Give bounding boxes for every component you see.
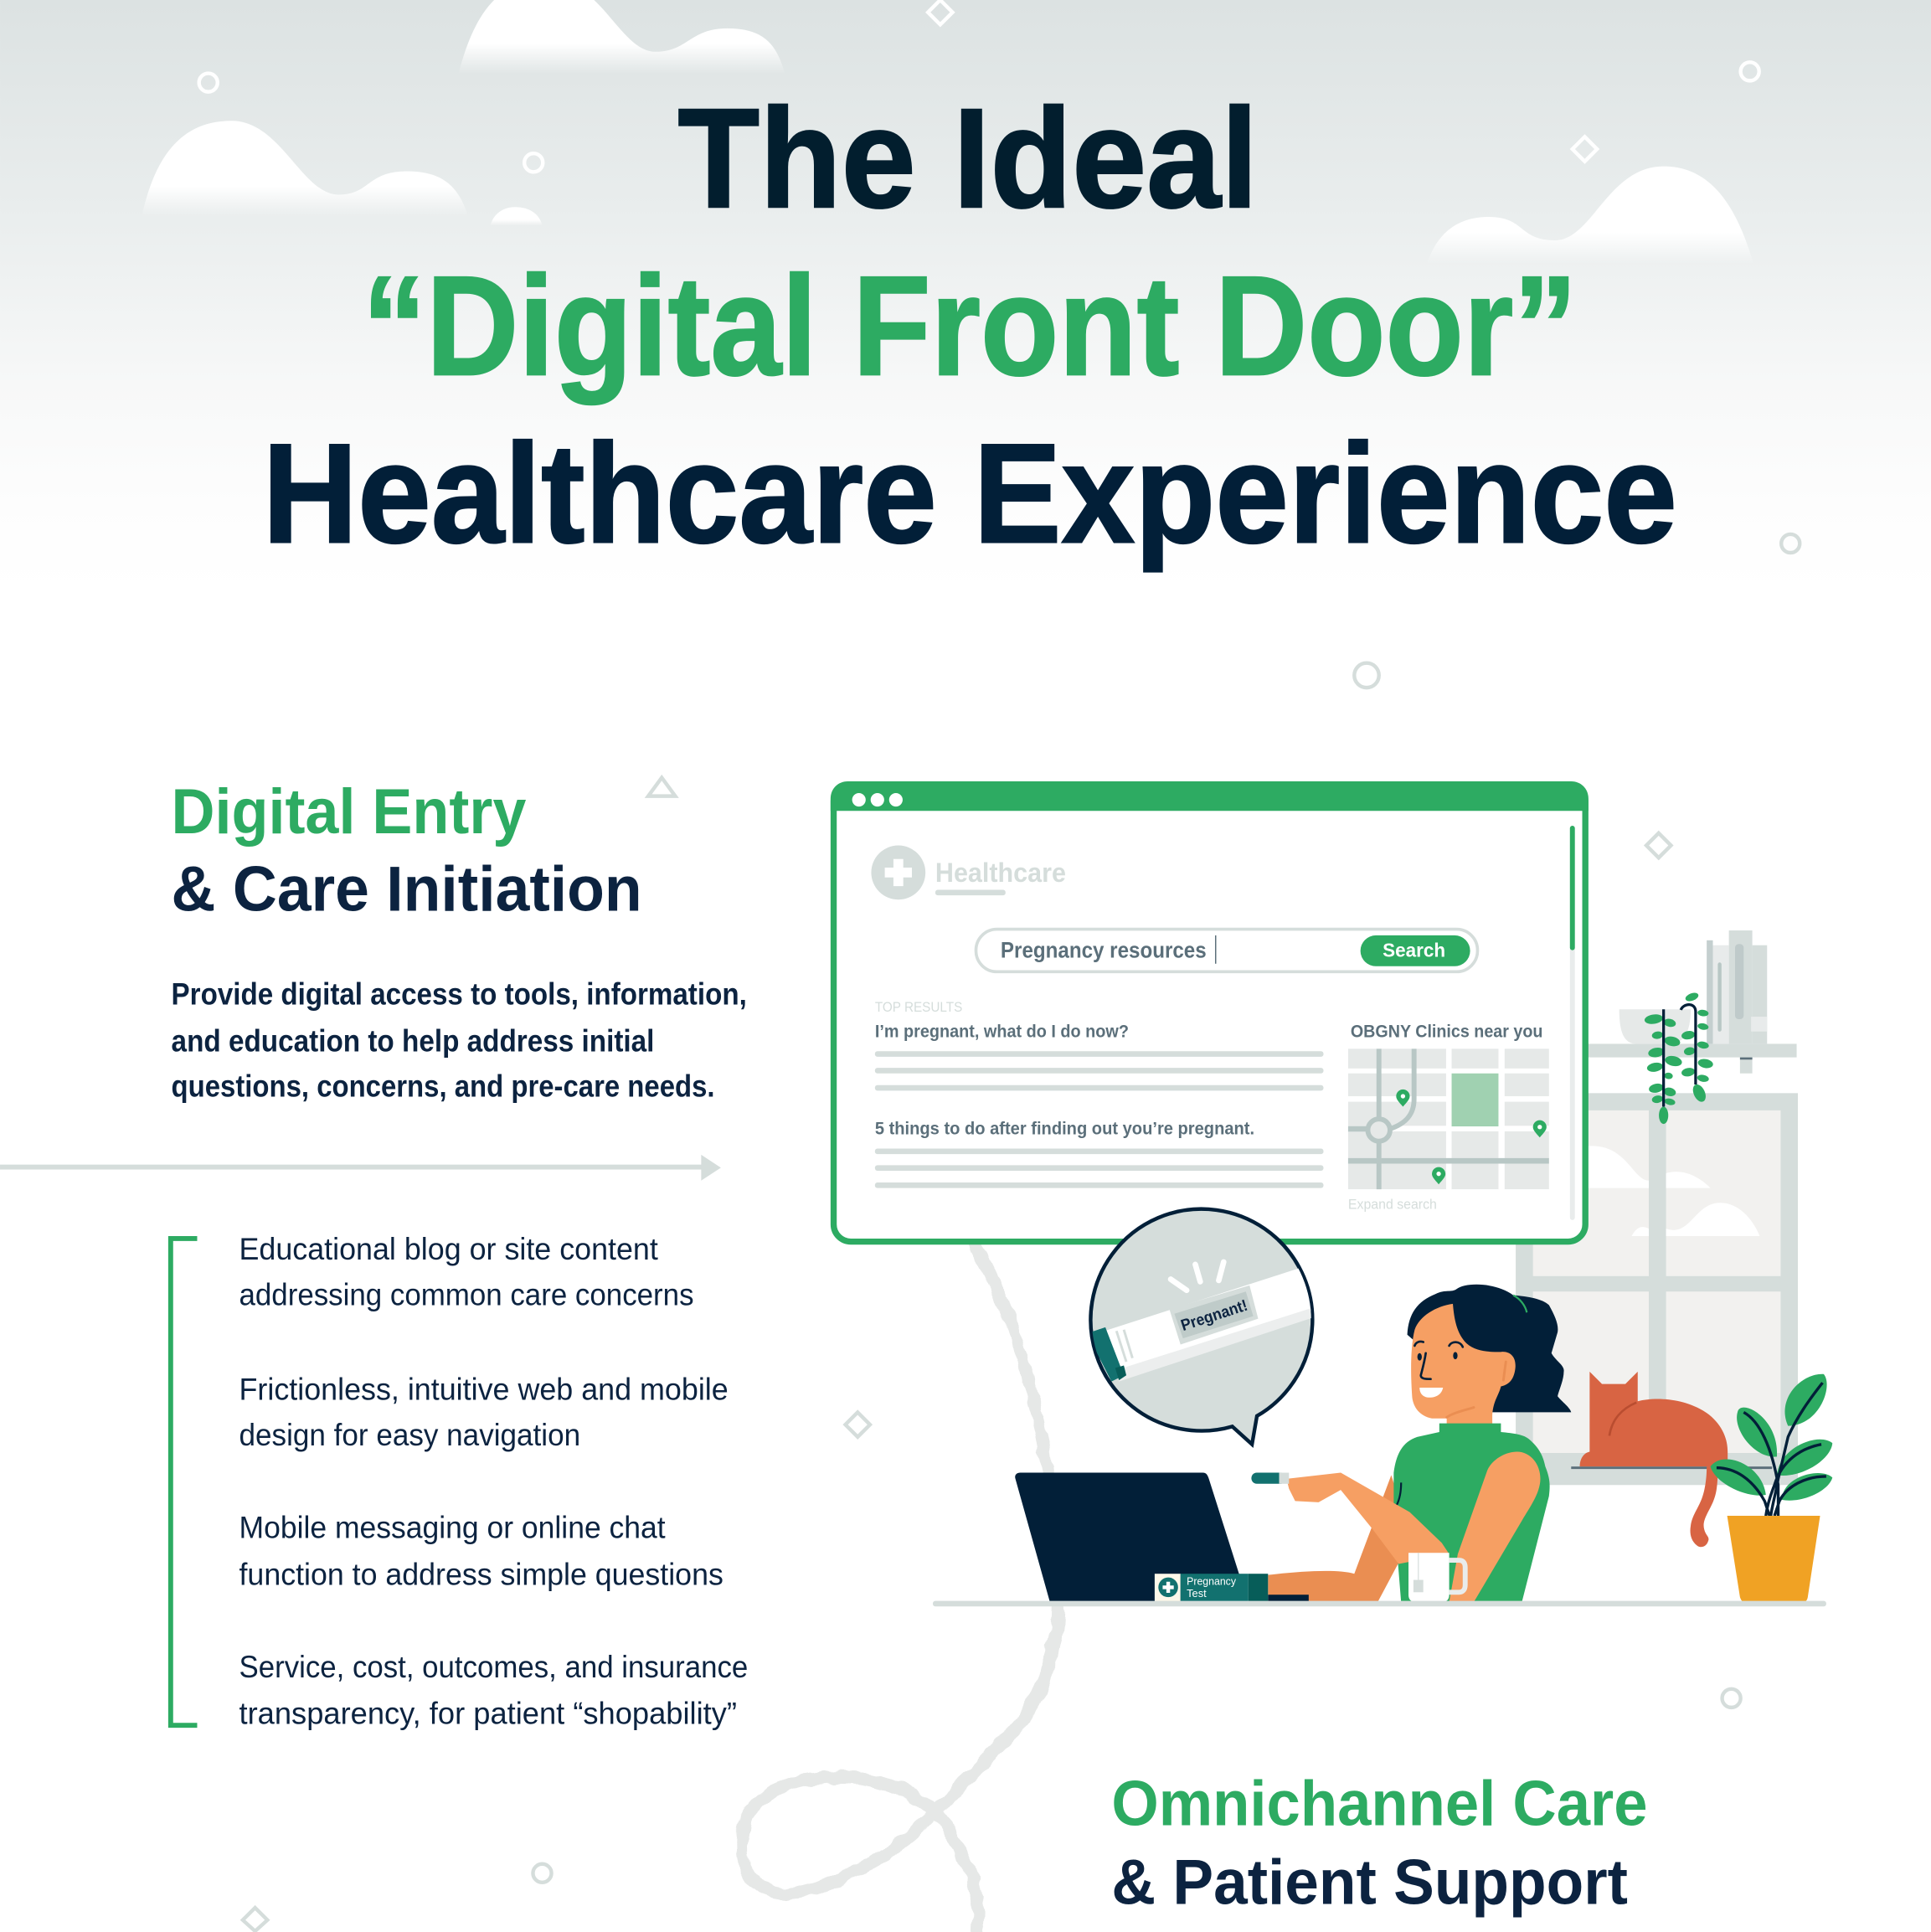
plant pot [1728, 1516, 1820, 1602]
pointing arm [1286, 1473, 1450, 1564]
hair tie [1513, 1296, 1527, 1312]
list bracket [171, 1239, 197, 1725]
shelf [1583, 1043, 1797, 1058]
arrow: section divider [0, 1155, 721, 1181]
window scene [1516, 930, 1798, 1485]
cat tail [1691, 1466, 1717, 1547]
scrollbar [1570, 826, 1575, 1220]
bowl [1619, 1009, 1691, 1043]
window clouds [1589, 1146, 1759, 1236]
feature list: design for easy navigation [239, 1418, 580, 1452]
cloud: upper left [142, 121, 468, 217]
cloud: right [1427, 167, 1753, 264]
top results: TOP RESULTS [875, 1000, 963, 1015]
intro paragraph: questions, concerns, and pre-care needs. [172, 1069, 715, 1104]
intro paragraph: Provide digital access to tools, information, [172, 976, 747, 1011]
cloud: small [491, 207, 543, 225]
pregnancy test box: Test [1187, 1587, 1207, 1600]
feature list: addressing common care concerns [239, 1277, 694, 1311]
facial features [1414, 1342, 1506, 1417]
desk [933, 1601, 1826, 1606]
heading: digital entry: & Care Initiation [172, 853, 642, 925]
pregnancy test box [1155, 1574, 1309, 1602]
speech bubble [1087, 1209, 1325, 1445]
top results [875, 1000, 1323, 1188]
heading: omnichannel care [1111, 1768, 1648, 1919]
intro paragraph: and education to help address initial [172, 1023, 654, 1058]
potted plant [1711, 1374, 1832, 1602]
mug [1408, 1553, 1465, 1602]
top results: 5 things to do after finding out you’re pregnant. [875, 1119, 1254, 1139]
pregnancy test box: Pregnancy [1187, 1574, 1236, 1587]
hair [1408, 1285, 1571, 1412]
heading: digital entry [172, 776, 642, 925]
pregnancy test stick: Pregnant! [1179, 1297, 1250, 1335]
pen [1251, 1473, 1289, 1484]
title: The Ideal [677, 79, 1259, 237]
back arm [1268, 1475, 1398, 1602]
feature list: transparency, for patient “shopability” [239, 1697, 737, 1731]
face and neck [1411, 1304, 1516, 1426]
near arm [1450, 1452, 1540, 1602]
feature list: Educational blog or site content [239, 1232, 658, 1266]
search bar: Search [1383, 940, 1445, 961]
woman at laptop [1251, 1285, 1571, 1602]
intro paragraph [172, 976, 747, 1104]
header gradient background [0, 0, 1931, 591]
search bar [976, 930, 1477, 971]
healthcare logo [871, 846, 1066, 899]
pregnancy test stick [1087, 1262, 1325, 1382]
heading: omnichannel care: & Patient Support [1111, 1847, 1628, 1919]
feature list: Frictionless, intuitive web and mobile [239, 1373, 729, 1407]
window panes [1533, 1110, 1780, 1453]
cat [1580, 1372, 1728, 1547]
clinics map [1348, 1021, 1549, 1213]
title: Healthcare Experience [262, 414, 1677, 572]
search bar: Pregnancy resources [1001, 937, 1207, 962]
title: “Digital Front Door” [363, 246, 1578, 404]
top fold line [1393, 1482, 1401, 1510]
window frame [1516, 1093, 1798, 1485]
feature list: Mobile messaging or online chat [239, 1511, 666, 1545]
browser frame [834, 785, 1585, 1242]
sill line [1571, 1466, 1772, 1469]
heading: omnichannel care: Omnichannel Care [1111, 1768, 1648, 1839]
clinics map: Expand search [1348, 1198, 1437, 1213]
browser window [831, 781, 1589, 1242]
feature list: Service, cost, outcomes, and insurance [239, 1650, 748, 1684]
heading: digital entry: Digital Entry [172, 776, 527, 848]
top results: I’m pregnant, what do I do now? [875, 1021, 1129, 1041]
feature list [239, 1232, 748, 1731]
hanging plants [1644, 992, 1714, 1124]
browser title bar [831, 781, 1589, 811]
cloud: top centre [458, 0, 785, 74]
feature list: function to address simple questions [239, 1557, 723, 1591]
clinics map: OBGNY Clinics near you [1351, 1021, 1542, 1041]
healthcare logo: Healthcare [935, 858, 1066, 888]
brush squiggle path [743, 1242, 1058, 1932]
title [262, 79, 1677, 572]
green top [1393, 1424, 1550, 1602]
laptop [1015, 1473, 1244, 1602]
books [1707, 930, 1767, 1043]
